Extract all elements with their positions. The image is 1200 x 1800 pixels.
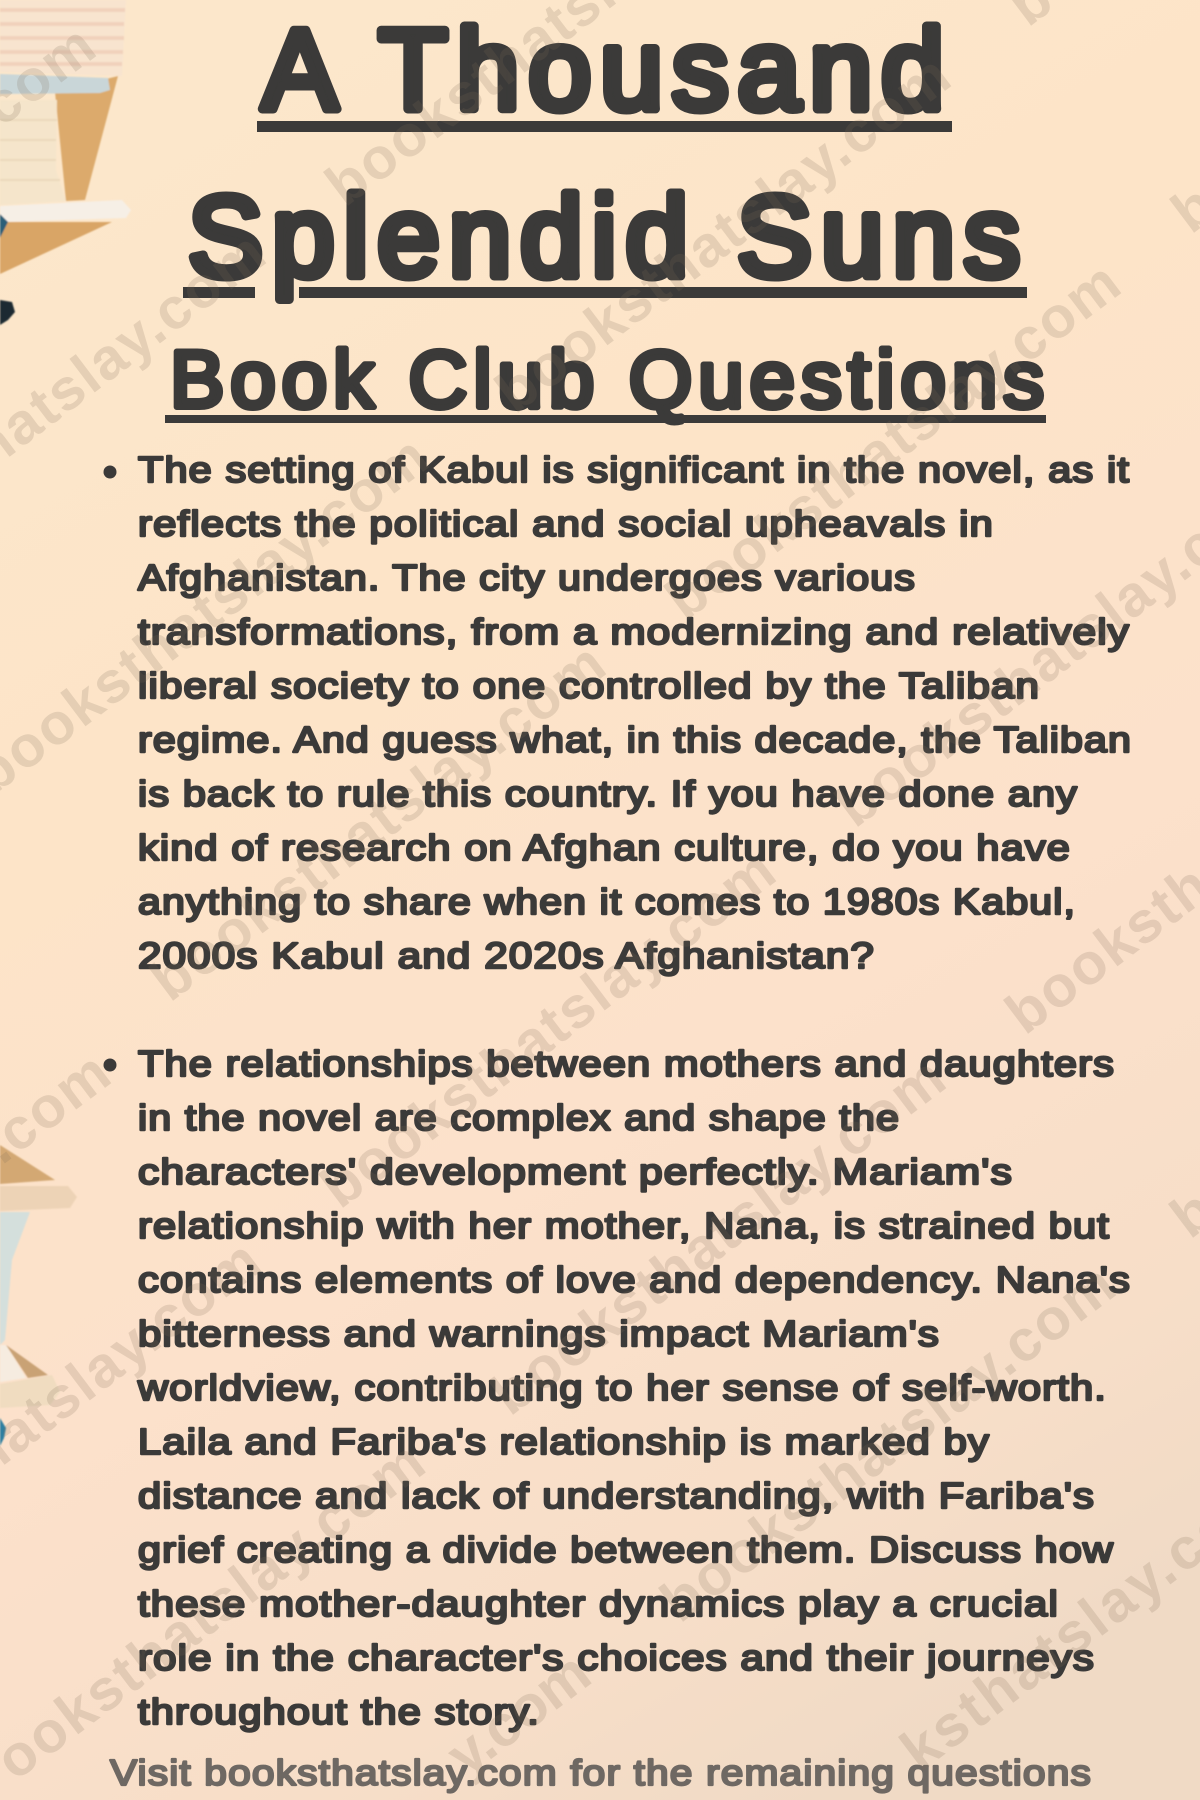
illustration: top book stack — [0, 0, 131, 325]
text block: question two: contains elements of love and dependency. Nana's — [138, 1259, 1131, 1300]
text block: question one: is back to rule this country. If you have done any — [138, 773, 1078, 814]
text block: question two: worldview, contributing to her sense of self-worth. — [137, 1367, 1107, 1408]
watermark pattern: booksthatslay.com — [139, 630, 617, 1013]
watermark pattern: booksthatslay.com — [484, 42, 962, 425]
text block: question one: kind of research on Afghan culture, do you have — [138, 827, 1071, 868]
text block: question one: transformations, from a modernizing and relatively — [138, 611, 1130, 652]
text block: question two: these mother-daughter dynamics play a crucial — [138, 1583, 1059, 1624]
footer: call to action: Visit booksthatslay.com for the remaining questions — [110, 1752, 1092, 1793]
text block: question two: Laila and Fariba's relationship is marked by — [138, 1421, 990, 1462]
text block: question two: The relationships between mothers and daughters — [138, 1043, 1115, 1084]
watermark pattern: booksthatslay.com — [654, 249, 1132, 632]
text block: question two: relationship with her mother, Nana, is strained but — [138, 1205, 1110, 1246]
text block: question one: reflects the political and social upheavals in — [138, 503, 994, 544]
heading: title line one: A Thousand — [262, 7, 953, 134]
text block: question two: characters' development perfectly. Mariam's — [138, 1151, 1013, 1192]
text block: question two: in the novel are complex and shape the — [138, 1097, 900, 1138]
watermark pattern: booksthatslay.com — [309, 837, 787, 1220]
text block: question one: Afghanistan. The city undergoes various — [138, 557, 916, 598]
text block: question one: liberal society to one controlled by the Taliban — [138, 665, 1040, 706]
text block: question one — [104, 449, 1132, 976]
illustration: lower book stack — [0, 1145, 77, 1446]
watermark pattern: booksthatslay.com — [479, 1044, 957, 1427]
text block: question two: bitterness and warnings impact Mariam's — [138, 1313, 940, 1354]
text block: question one: regime. And guess what, in this decade, the Taliban — [138, 719, 1132, 760]
text block: question one: 2000s Kabul and 2020s Afghanistan? — [138, 935, 875, 976]
watermark pattern: y.com — [435, 1640, 602, 1788]
text block: question two — [104, 1043, 1131, 1732]
watermark pattern: booksthatslay.com — [649, 1251, 1127, 1634]
text block: question two: distance and lack of understanding, with Fariba's — [138, 1475, 1095, 1516]
heading: subtitle: Book Club Questions — [170, 335, 1050, 425]
text block: question two: throughout the story. — [138, 1691, 540, 1732]
text block: question two: role in the character's choices and their journeys — [138, 1637, 1095, 1678]
text block: question two: grief creating a divide between them. Discuss how — [138, 1529, 1114, 1570]
text block: question one: anything to share when it comes to 1980s Kabul, — [138, 881, 1076, 922]
heading: title line two: Splendid Suns — [188, 174, 1029, 301]
text block: question one: The setting of Kabul is significant in the novel, as it — [138, 449, 1130, 490]
